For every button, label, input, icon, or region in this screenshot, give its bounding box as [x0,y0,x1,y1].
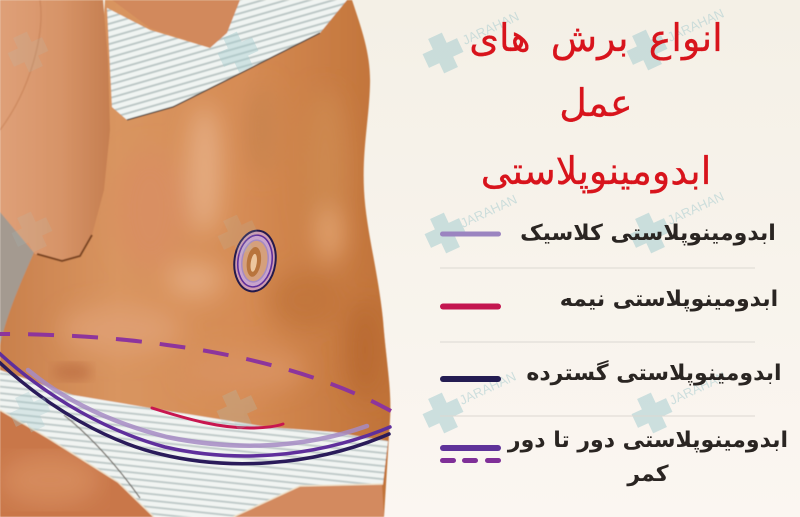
watermark row bottom: JARAHAN [457,368,518,408]
hip skin shadow [52,363,92,381]
legend row: extended: ابدومینوپلاستی گسترده [526,359,782,386]
incision: classic (light purple) [28,370,367,446]
incision: mini (red) [152,408,283,428]
chest skin above bra [112,0,240,48]
watermark row middle: JARAHAN [665,188,726,228]
watermark row top [3,5,726,78]
navel rings [230,228,280,294]
bra top [107,0,347,120]
torso skin [0,0,390,517]
watermark row middle: JARAHAN [458,191,519,231]
gray backdrop behind arm [0,210,40,345]
photo: torso in bikini [0,0,390,517]
title [469,16,723,194]
watermark row bottom: JARAHAN [667,368,728,408]
legend row: circumferential: ابدومینوپلاستی دور تا دور [507,428,788,453]
watermarks [3,5,728,438]
title: ابدومینوپلاستی [481,149,711,194]
legend row: mini [440,287,778,312]
watermark row bottom [5,368,728,438]
incision: circumferential dashed (purple) [0,334,391,411]
watermark row top: JARAHAN [460,8,521,48]
legend row: circumferential [440,428,788,487]
muscle shading on torso [60,85,383,400]
legend [440,221,788,487]
thigh skin [0,405,155,517]
incision: extended (navy) [0,361,389,464]
title: عمل [559,81,633,125]
legend row: mini: ابدومینوپلاستی نیمه [560,287,778,312]
incision: circumferential solid (purple) [0,352,390,456]
watermark row top: JARAHAN [665,5,726,45]
title: انواع برش های [469,16,723,61]
legend row: extended [440,359,782,386]
legend row: circumferential: کمر [626,462,669,487]
watermark row middle [7,188,726,260]
arm [0,0,110,260]
legend row: classic: ابدومینوپلاستی کلاسیک [520,221,776,246]
bikini bottom [0,370,388,517]
